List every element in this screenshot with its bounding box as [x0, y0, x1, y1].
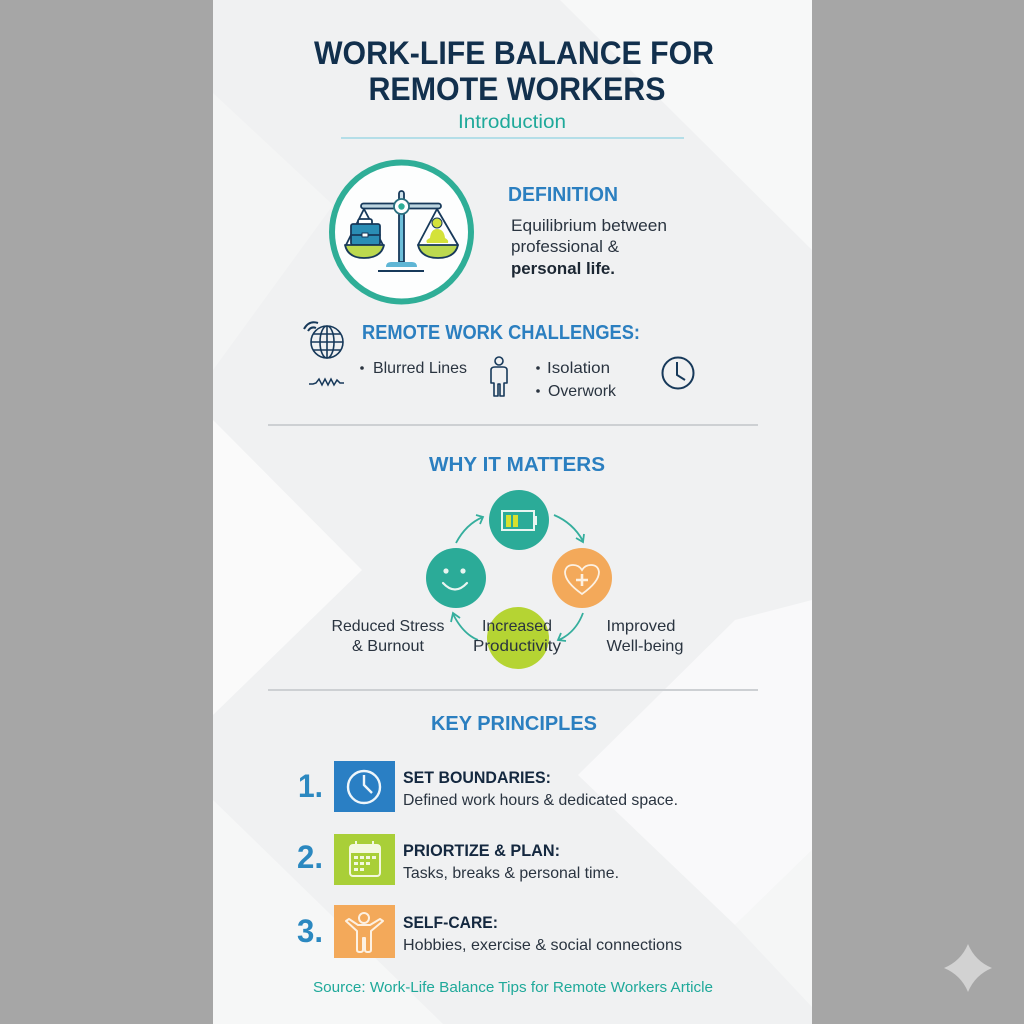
heading: why it matters: WHY IT MATTERS: [429, 454, 605, 476]
heading: key principles: KEY PRINCIPLES: [431, 713, 597, 735]
node: battery: [489, 490, 549, 550]
panel: background sheet: [213, 0, 812, 1024]
principle 2: 2.: [297, 839, 323, 875]
label: improved well-being: [606, 618, 684, 655]
principle 1: SET BOUNDARIES:: [403, 769, 551, 787]
principle 1: 1.: [298, 768, 323, 804]
node: heart: [552, 548, 612, 608]
label: increased productivity: Increased: [482, 618, 552, 635]
definition block: professional &: [511, 237, 620, 256]
label: improved well-being: Improved: [606, 618, 676, 635]
label: increased productivity: [473, 618, 561, 655]
title: WORK-LIFE BALANCE FOR: [314, 35, 714, 71]
icon: wavy line: [309, 379, 344, 385]
cycle diagram: [332, 490, 684, 669]
label: reduced stress: [332, 618, 444, 655]
arrows: [451, 515, 584, 641]
label: reduced stress: & Burnout: [352, 638, 425, 655]
label: reduced stress: Reduced Stress: [332, 618, 444, 635]
principle 2: [297, 834, 619, 885]
definition block: [508, 184, 667, 278]
icon: clock: [662, 358, 694, 388]
challenges: isolation and overwork: Overwork: [548, 383, 617, 400]
definition block: DEFINITION: [508, 184, 618, 206]
label: increased productivity: Productivity: [473, 638, 561, 655]
challenge: blurred lines: Blurred Lines: [373, 360, 467, 377]
principle 1: [298, 761, 678, 812]
source: Source: Work-Life Balance Tips for Remote Workers Article: [313, 979, 713, 996]
icon: person tile: [334, 905, 395, 958]
principle 3: 3.: [297, 913, 323, 949]
icon: person: [491, 357, 507, 396]
principle 2: PRIORTIZE & PLAN:: [403, 842, 560, 860]
principle 1: Defined work hours & dedicated space.: [403, 792, 678, 809]
icon: calendar tile: [334, 834, 395, 885]
definition block: Equilibrium between: [511, 216, 667, 235]
definition block: personal life.: [511, 259, 615, 278]
principle 3: SELF-CARE:: [403, 914, 498, 932]
principle 3: [297, 905, 682, 958]
heading: remote work challenges: REMOTE WORK CHALLENGES:: [362, 322, 640, 344]
label: improved well-being: Well-being: [606, 638, 684, 655]
principle 2: Tasks, breaks & personal time.: [403, 865, 619, 882]
challenges: isolation and overwork: [536, 360, 617, 400]
icon: globe with signal: [304, 322, 343, 358]
challenges: isolation and overwork: Isolation: [547, 360, 610, 377]
subtitle: introduction: Introduction: [458, 112, 566, 133]
icon: sparkle watermark: [944, 944, 992, 992]
node: productivity: [487, 607, 549, 669]
title: REMOTE WORKERS: [368, 71, 666, 107]
title: [314, 35, 714, 107]
node: smiley: [426, 548, 486, 608]
icon: balance scale: [332, 162, 471, 302]
icon: clock tile: [334, 761, 395, 812]
principle 3: Hobbies, exercise & social connections: [403, 937, 682, 954]
